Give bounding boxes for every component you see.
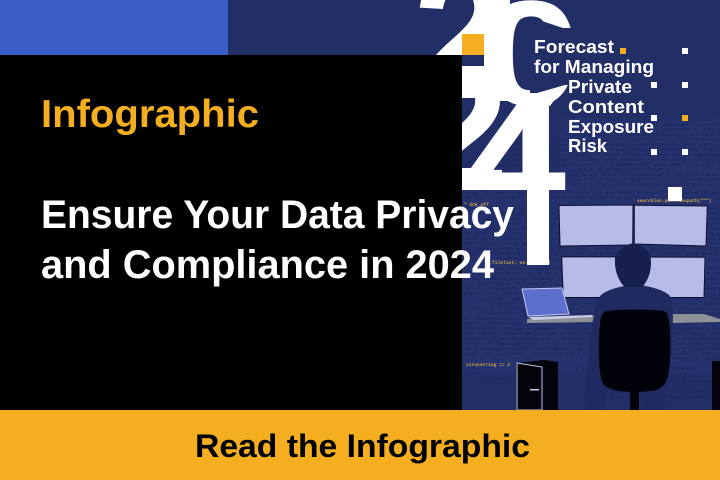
big year numerals 2024 [420,0,570,265]
panel: blue corner block [0,0,228,55]
heading: and Compliance in 2024 [41,243,495,287]
yellow code labels: virusstring == I [466,362,510,368]
code texture background: strings = extract_strings(filepath); for s in strings: if virusstring in s: infected.append(filepath) [464,277,718,282]
chair stem [630,391,639,410]
subtitle: Forecast for Managing Private Content Exposure Risk: Private [568,77,632,97]
panel: black content block [0,55,462,410]
call to action bar: Read the Infographic [195,428,530,464]
call to action bar [0,410,720,480]
code texture background: for target in target_list: print("Scanning:", target) # worm_hash [560,138,720,143]
yellow code labels: * @Ck_off [464,202,489,208]
code texture background: """scansfile [480,378,511,383]
yellow code labels [464,198,711,368]
heading: Ensure Your Data Privacy [41,193,515,237]
subtitle: Forecast for Managing Private Content Exposure Risk: Forecast [534,37,614,57]
illustration: person at desk [585,243,673,410]
numeral 4: 4 [466,67,564,247]
code texture background: file list = process_files(target) with open(path) as f: data [566,183,717,188]
numeral 2, lower: 2 [410,29,509,228]
code texture background: "" [500,384,505,389]
chair [599,310,670,392]
label: Infographic: Infographic [41,93,259,136]
person body [585,285,673,410]
code texture background: if target: open(target); target.close(); target() [590,389,713,394]
code texture background: "scan_target" "type" "fileset_database" :: searchpath "target" [566,173,720,178]
subtitle: Forecast for Managing Private Content Exposure Risk: Exposure [568,117,654,137]
yellow code labels: searchlos.path.abspath(""") [637,198,711,204]
illustration: desk [527,314,720,323]
illustration: right cabinet [712,361,720,410]
decorative square grid [620,48,688,201]
code texture background: target = next(files); check(target); print target() [590,379,718,384]
illustration: cabinet with door [516,360,558,410]
code texture background: if len(target) == 0: return False; print(target) [575,367,696,372]
code texture background [464,118,720,400]
panel: lighter code area [462,118,720,372]
code texture background: if (target_group): filter target in targets; return results.append(target, group, hash, size, date) [465,163,714,168]
illustration: monitors [559,205,707,298]
code texture background: : hash_type in str.split(target) "scan list: ..." [566,168,689,173]
subtitle: Forecast for Managing Private Content Exposure Risk: for Managing [534,57,654,77]
heading [41,193,515,287]
person head [615,243,651,287]
code texture background: if file in target: print(file, target) target() [590,395,708,400]
code texture background: size [470,367,481,372]
subtitle: Forecast for Managing Private Content Exposure Risk [534,37,654,156]
yellow square accent [462,34,484,55]
yellow code labels: filelist: os.password [492,260,550,266]
panel: navy artwork background [228,0,720,410]
illustration: laptop [522,288,592,320]
subtitle: Forecast for Managing Private Content Exposure Risk: Content [568,97,644,117]
code texture background: target = "Properties" if target found not in directory: print [566,178,720,183]
subtitle: Forecast for Managing Private Content Exposure Risk: Risk [568,136,608,156]
